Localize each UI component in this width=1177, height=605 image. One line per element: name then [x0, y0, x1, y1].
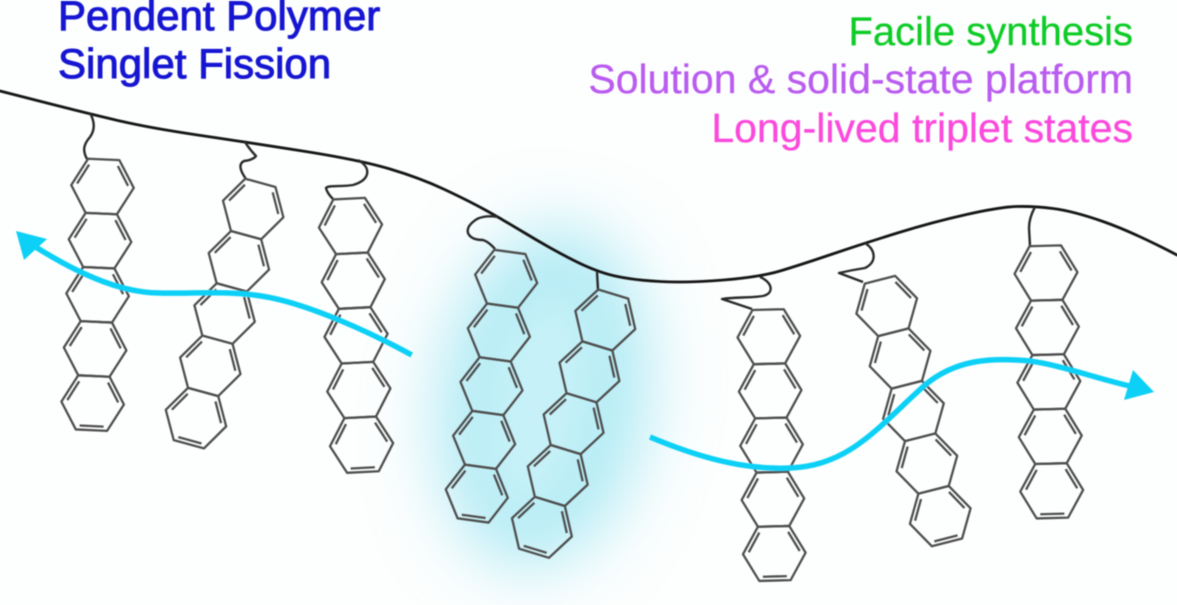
glow: excited pentacene pair — [416, 212, 670, 582]
arrow: right triplet migration — [650, 360, 1154, 468]
feature list — [588, 10, 1133, 151]
polymer backbone — [0, 91, 1177, 282]
arrow: left triplet migration — [16, 231, 412, 355]
pentacene 3 — [318, 197, 395, 474]
title — [58, 0, 380, 87]
pentacene 4 — [442, 248, 541, 525]
title: Singlet Fission — [58, 40, 331, 87]
feature: facile synthesis: Facile synthesis — [848, 10, 1133, 54]
feature: solution and solid-state platform: Solution & solid-state platform — [588, 56, 1133, 102]
pentacene 1 — [60, 158, 135, 432]
pendent linkers — [84, 113, 1035, 309]
feature: long-lived triplet states: Long-lived triplet states — [711, 105, 1133, 151]
pentacene 2 — [159, 175, 291, 453]
pentacene 7 — [850, 272, 977, 550]
pentacene 5 — [504, 285, 643, 562]
pentacene 8 — [1014, 245, 1084, 519]
pentacene 6 — [737, 309, 806, 581]
